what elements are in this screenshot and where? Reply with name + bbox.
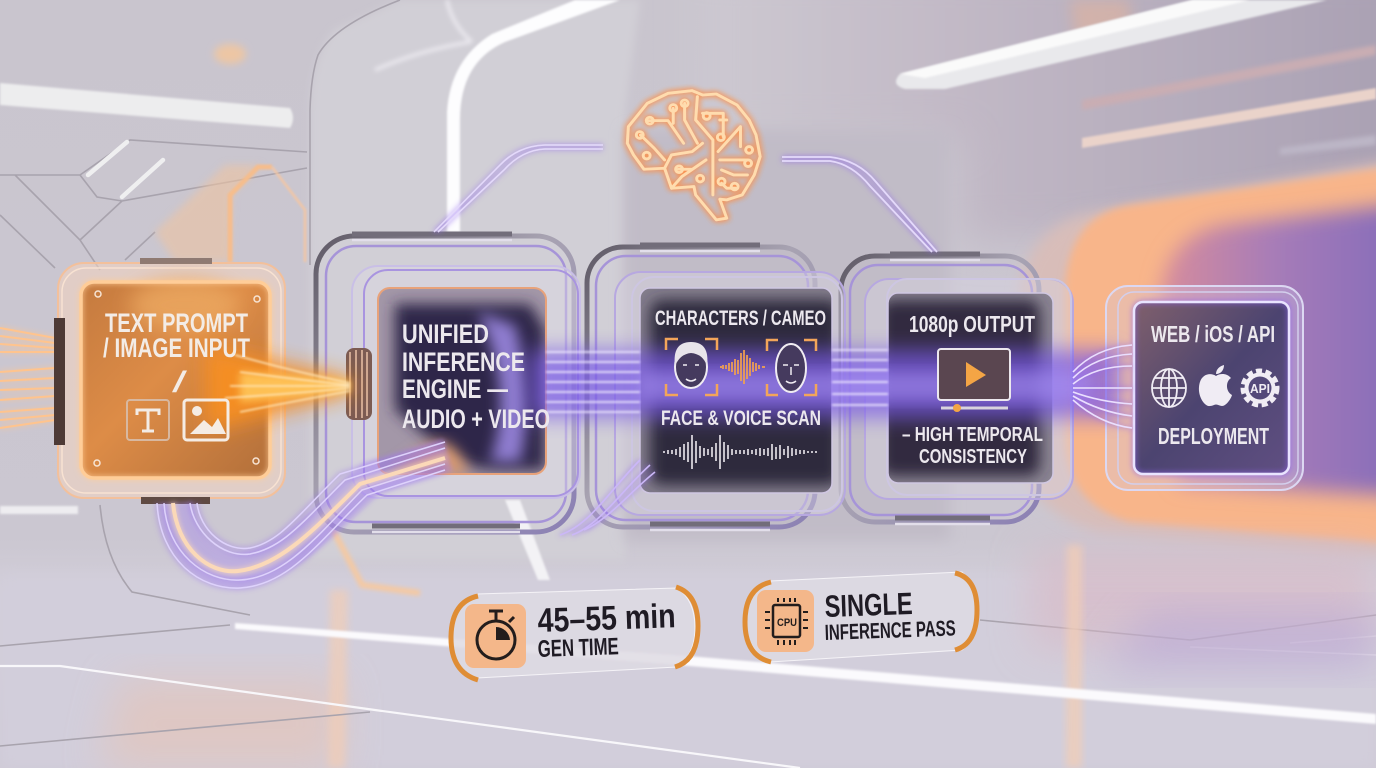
wire: engine to brain: [434, 145, 603, 232]
connector ring: [346, 348, 372, 420]
icon: stopwatch: [465, 604, 526, 668]
text: 1080p output: 1080p OUTPUT: [909, 311, 1035, 337]
text: unified inference engine: AUDIO + VIDEO: [402, 404, 550, 434]
icon: text box: [127, 400, 169, 440]
stat chip: generation time: GEN TIME: [537, 633, 619, 663]
panel 5 glass: deployment: [1106, 286, 1303, 490]
panel 1: text prompt / image input: [54, 258, 285, 504]
chrome frames behind the panels: [316, 234, 1039, 532]
icon: api gear: [1243, 371, 1277, 405]
text: unified inference engine: ENGINE —: [402, 374, 508, 404]
icon: globe: [1152, 369, 1186, 407]
incoming orange fibers: [0, 328, 55, 428]
icon: image box: [184, 400, 228, 440]
icon: orange voice wave: [720, 350, 765, 384]
icon: face scan left: [666, 339, 717, 395]
text: characters / cameo: CHARACTERS / CAMEO: [655, 307, 826, 330]
text: high temporal consistency: CONSISTENCY: [919, 446, 1027, 468]
text: face & voice scan: FACE & VOICE SCAN: [661, 407, 821, 430]
wire: brain to output: [782, 157, 937, 252]
panel 4 glass: 1080p output: [865, 279, 1073, 499]
stat chip: generation time: [451, 587, 698, 680]
text: deployment: DEPLOYMENT: [1158, 423, 1269, 449]
icon: voice waveform: [664, 435, 816, 469]
text: unified inference engine: INFERENCE: [402, 347, 525, 377]
text: unified inference engine: [402, 319, 550, 434]
stat chip: single inference pass: SINGLE: [824, 586, 913, 624]
text: text prompt / image input: [103, 308, 250, 399]
icon: cpu chip: CPU: [777, 617, 797, 629]
text: text prompt / image input: / IMAGE INPUT: [103, 333, 250, 363]
orange energy beam: [205, 345, 352, 432]
stat chip: single inference pass: INFERENCE PASS: [824, 615, 956, 645]
text: text prompt / image input: /: [172, 366, 188, 399]
icon: circuit brain: [627, 91, 760, 220]
text: high temporal consistency: [902, 424, 1043, 468]
purple energy beams: [530, 345, 1132, 428]
stat chip: single inference pass: [745, 572, 977, 662]
floor lines: [235, 623, 1376, 724]
text: text prompt / image input: TEXT PROMPT: [105, 308, 248, 338]
orange room: [1020, 150, 1376, 560]
ceiling strips: [0, 83, 293, 128]
door light: [155, 165, 262, 262]
icon: api gear: API: [1250, 381, 1270, 396]
panel 2 glass: unified inference engine: [346, 266, 580, 498]
text: high temporal consistency: – HIGH TEMPORAL: [902, 424, 1043, 446]
curved fiber cable under panels: [157, 442, 655, 588]
text: web / ios / api: WEB / iOS / API: [1151, 321, 1275, 347]
icon: apple: [1199, 365, 1232, 406]
floor reflections: [1030, 548, 1376, 650]
icon: cpu chip: [757, 590, 814, 652]
text: unified inference engine: UNIFIED: [402, 319, 489, 349]
brain downlink: [701, 218, 703, 246]
panel 3 glass: characters cameo: [615, 272, 845, 515]
icon: video player: [938, 349, 1010, 412]
stat chip: generation time: 45–55 min: [537, 597, 676, 640]
icon: face scan right: [767, 340, 816, 395]
